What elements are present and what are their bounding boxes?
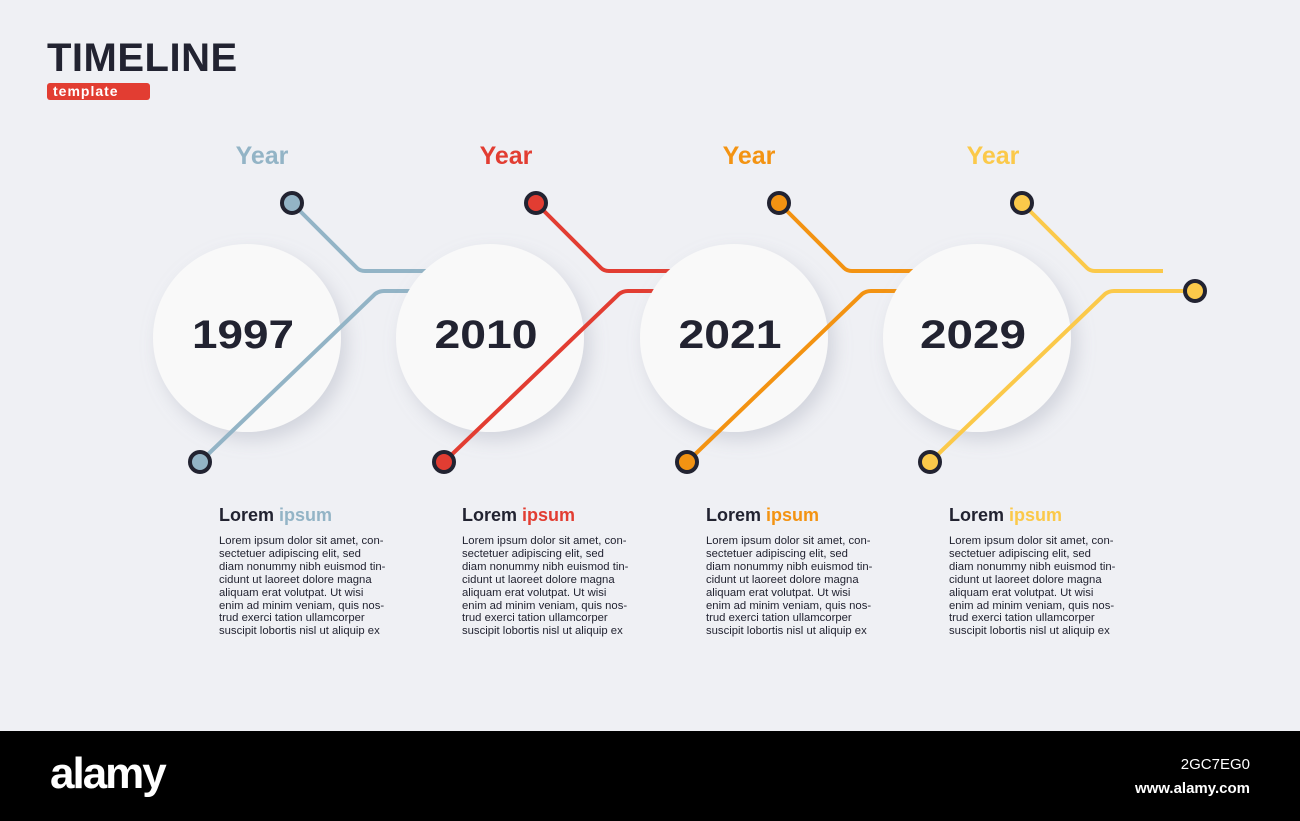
year labels: Year <box>967 142 1019 170</box>
stage 2: 2010 <box>434 313 538 357</box>
stage 3 <box>640 193 927 472</box>
text block 3 <box>706 505 872 637</box>
stage 1 <box>153 193 440 472</box>
text block 2: enim ad minim veniam, quis nos- <box>462 600 627 612</box>
text block 3: aliquam erat volutpat. Ut wisi <box>706 587 850 599</box>
text block 2: Lorem ipsum dolor sit amet, con- <box>462 535 626 547</box>
text block 4: diam nonummy nibh euismod tin- <box>949 561 1115 573</box>
stage 4 <box>883 193 1205 472</box>
text block 1: cidunt ut laoreet dolore magna <box>219 574 372 586</box>
text block 4: Lorem ipsum <box>949 505 1062 525</box>
stage 4: 2029 <box>920 313 1026 357</box>
text block 4: sectetuer adipiscing elit, sed <box>949 548 1091 560</box>
text block 1: Lorem ipsum dolor sit amet, con- <box>219 535 384 547</box>
text block 4: cidunt ut laoreet dolore magna <box>949 574 1102 586</box>
text block 1: diam nonummy nibh euismod tin- <box>219 561 385 573</box>
text block 3: enim ad minim veniam, quis nos- <box>706 600 871 612</box>
text block 3: Lorem ipsum dolor sit amet, con- <box>706 535 870 547</box>
text block 1: sectetuer adipiscing elit, sed <box>219 548 361 560</box>
year labels: Year <box>480 142 532 170</box>
text block 2 <box>462 505 628 637</box>
stage 3: 2021 <box>678 313 782 357</box>
text block 3: trud exerci tation ullamcorper <box>706 612 852 624</box>
stage 1: 1997 <box>192 313 294 357</box>
text block 1: suscipit lobortis nisl ut aliquip ex <box>219 625 380 637</box>
year labels: Year <box>236 142 288 170</box>
footer bar: 2GC7EG0 <box>1181 756 1250 773</box>
text block 3: diam nonummy nibh euismod tin- <box>706 561 872 573</box>
text block 2: suscipit lobortis nisl ut aliquip ex <box>462 625 623 637</box>
text block 4: Lorem ipsum dolor sit amet, con- <box>949 535 1114 547</box>
year labels: Year <box>723 142 775 170</box>
text block 2: Lorem ipsum <box>462 505 575 525</box>
text block 1: trud exerci tation ullamcorper <box>219 612 365 624</box>
title: TIMELINE <box>47 36 238 80</box>
text block 2: diam nonummy nibh euismod tin- <box>462 561 628 573</box>
text block 1 <box>219 505 385 637</box>
text block 2: aliquam erat volutpat. Ut wisi <box>462 587 606 599</box>
text block 4: enim ad minim veniam, quis nos- <box>949 600 1114 612</box>
text block 4: trud exerci tation ullamcorper <box>949 612 1095 624</box>
text block 3: Lorem ipsum <box>706 505 819 525</box>
stage 2 <box>396 193 684 472</box>
text block 4: aliquam erat volutpat. Ut wisi <box>949 587 1093 599</box>
text block 1: enim ad minim veniam, quis nos- <box>219 600 384 612</box>
year labels <box>236 142 1019 170</box>
subtitle tag <box>47 83 150 100</box>
text block 2: trud exerci tation ullamcorper <box>462 612 608 624</box>
text block 3: cidunt ut laoreet dolore magna <box>706 574 859 586</box>
text block 1: aliquam erat volutpat. Ut wisi <box>219 587 363 599</box>
footer bar: www.alamy.com <box>1135 780 1250 797</box>
text block 3: suscipit lobortis nisl ut aliquip ex <box>706 625 867 637</box>
title <box>47 36 238 100</box>
text block 4: suscipit lobortis nisl ut aliquip ex <box>949 625 1110 637</box>
text block 2: cidunt ut laoreet dolore magna <box>462 574 615 586</box>
text block 1: Lorem ipsum <box>219 505 332 525</box>
text block 4 <box>949 505 1115 637</box>
text block 3: sectetuer adipiscing elit, sed <box>706 548 848 560</box>
text block 2: sectetuer adipiscing elit, sed <box>462 548 604 560</box>
footer bar: alamy <box>50 749 165 798</box>
footer bar <box>0 731 1300 821</box>
subtitle tag: template <box>53 83 119 99</box>
